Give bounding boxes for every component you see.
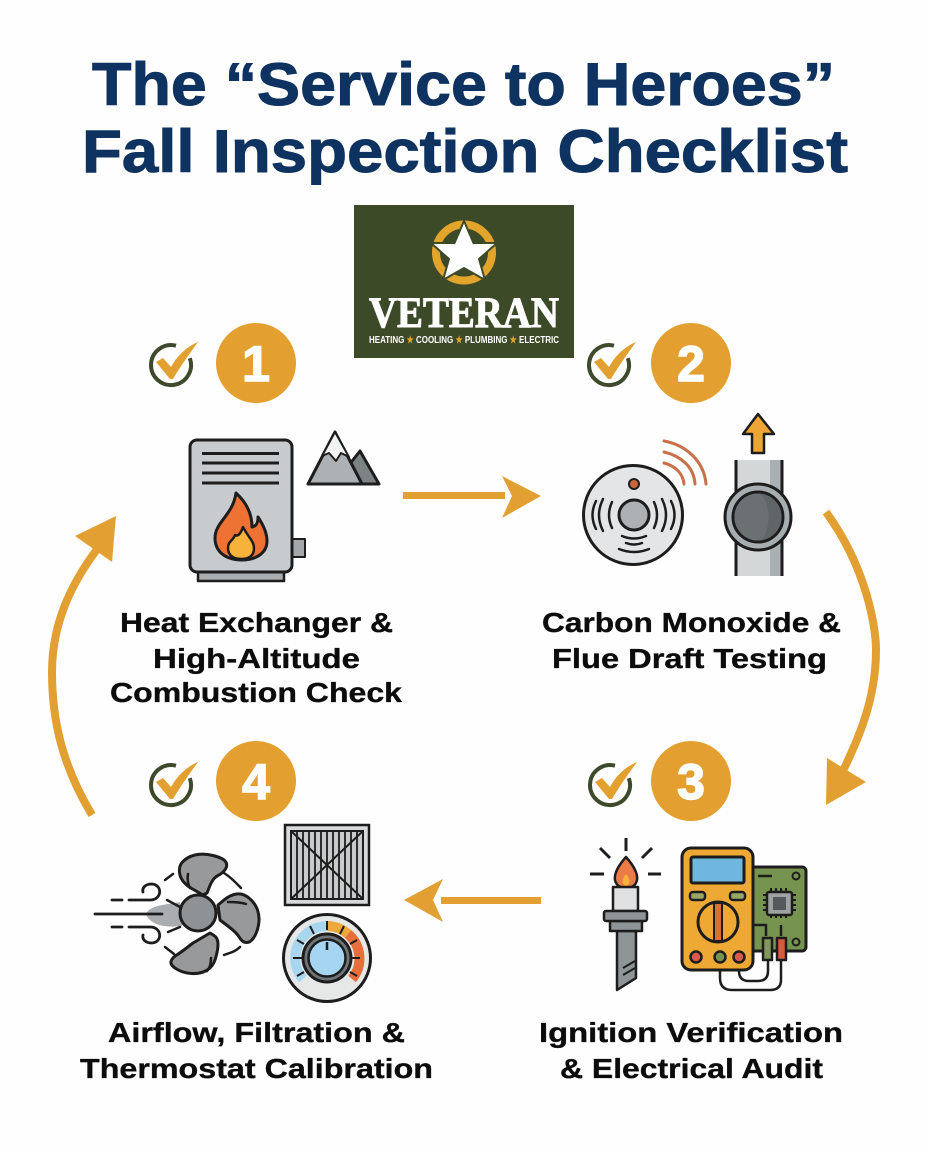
icon: furnace with flame bbox=[190, 440, 305, 581]
logo: Veteran: VETERAN bbox=[369, 290, 559, 337]
step 1 check icon bbox=[151, 342, 198, 385]
step 4 number badge: 4 bbox=[242, 754, 270, 810]
logo: Veteran bbox=[354, 205, 574, 358]
arrow: step 2 to 3 bbox=[826, 512, 876, 805]
step 3 number badge: 3 bbox=[677, 754, 705, 810]
label: step 1 bbox=[110, 607, 402, 708]
step 4 number badge bbox=[216, 741, 296, 821]
label: step 1: Combustion Check bbox=[110, 677, 402, 708]
icon: carbon monoxide detector bbox=[584, 441, 706, 564]
icon: flue pipe with draft arrow bbox=[725, 414, 791, 576]
arrow: step 4 to 1 bbox=[52, 516, 116, 815]
arrow: step 3 to 4 bbox=[404, 879, 541, 922]
step 3 number badge bbox=[651, 741, 731, 821]
step 2 number badge: 2 bbox=[677, 336, 705, 392]
label: step 1: Heat Exchanger & bbox=[120, 607, 393, 638]
icon: air filter bbox=[285, 825, 369, 905]
label: step 2 bbox=[542, 607, 841, 674]
title bbox=[82, 51, 848, 185]
label: step 2: Flue Draft Testing bbox=[552, 643, 827, 674]
step 1 number badge: 1 bbox=[242, 336, 270, 392]
step 2 number badge bbox=[651, 323, 731, 403]
icon: mountains bbox=[308, 432, 379, 484]
icon: thermostat bbox=[284, 914, 370, 1002]
icon: multimeter and circuit board bbox=[682, 848, 806, 990]
icon: fan with airflow bbox=[95, 854, 259, 974]
label: step 4: Thermostat Calibration bbox=[80, 1053, 433, 1084]
label: step 2: Carbon Monoxide & bbox=[542, 607, 841, 638]
step 3 check icon bbox=[590, 762, 637, 805]
title: The “Service to Heroes” bbox=[92, 51, 835, 118]
label: step 4 bbox=[80, 1017, 433, 1084]
label: step 3: & Electrical Audit bbox=[560, 1053, 823, 1084]
title: Fall Inspection Checklist bbox=[82, 118, 848, 185]
label: step 3: Ignition Verification bbox=[539, 1017, 843, 1048]
step 1 number badge bbox=[216, 323, 296, 403]
label: step 1: High-Altitude bbox=[153, 643, 360, 674]
logo: Veteran: HEATING ★ COOLING ★ PLUMBING ★ ELECTRIC bbox=[369, 335, 559, 346]
label: step 3 bbox=[539, 1017, 843, 1084]
label: step 4: Airflow, Filtration & bbox=[108, 1017, 405, 1048]
step 2 check icon bbox=[589, 342, 636, 385]
arrow: step 1 to 2 bbox=[403, 476, 541, 518]
icon: igniter bbox=[590, 838, 661, 990]
step 4 check icon bbox=[151, 762, 198, 805]
